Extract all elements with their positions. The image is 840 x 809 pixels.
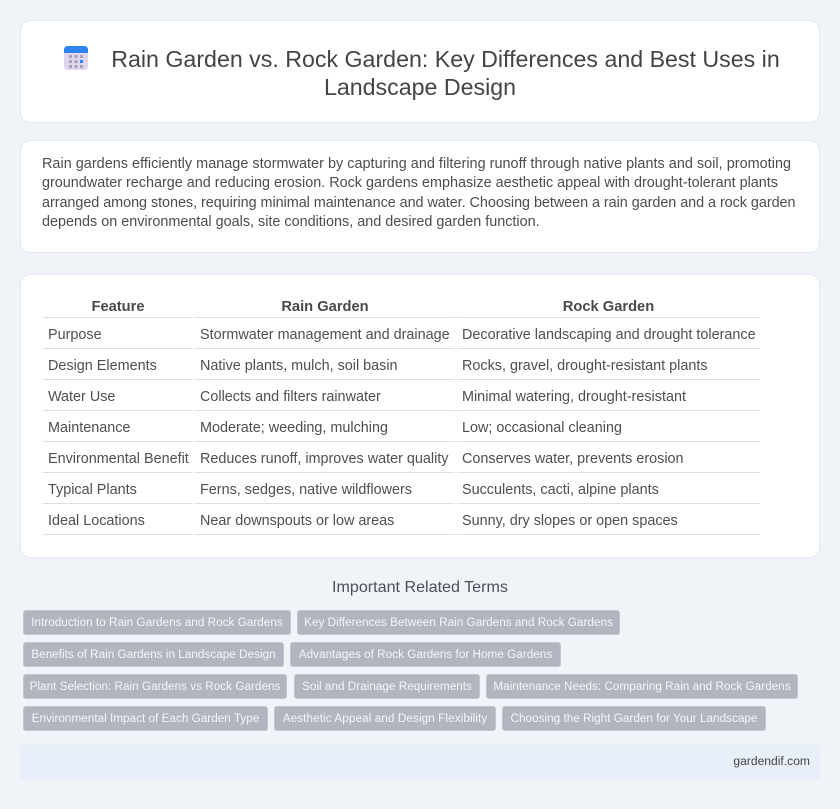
row: Water Use: Minimal watering, drought-resistant [462,389,686,405]
intro text: Rain gardens efficiently manage stormwater by capturing and filtering runoff through native plants and soil, promoting [42,156,791,172]
tag [290,642,561,667]
tag [23,674,287,699]
intro panel [20,140,820,253]
row: Ideal Locations: Near downspouts or low areas [200,513,394,529]
footer site name: gardendif.com [733,754,810,768]
title [111,46,780,100]
intro text: depends on environmental goals, site conditions, and desired garden function. [42,214,540,230]
row: Water Use: Collects and filters rainwater [200,389,381,405]
icon: calendar [64,46,88,70]
row: Environmental Benefit: Environmental Benefit [48,451,189,467]
intro text: arranged among stones, requiring minimal maintenance and water. Choosing between a rain garden and a rock garden [42,195,795,211]
row: Design Elements: Rocks, gravel, drought-resistant plants [462,358,708,374]
tag [297,610,620,635]
tag: Environmental Impact of Each Garden Type [32,712,259,725]
table headers: Rain Garden [281,299,369,315]
intro text: groundwater recharge and reducing erosion. Rock gardens emphasize aesthetic appeal with drought-tolerant plants [42,175,778,191]
tag [23,706,268,731]
tag: Introduction to Rain Gardens and Rock Gardens [31,616,283,629]
footer bar [20,745,820,779]
intro text [42,156,795,230]
row: Purpose: Stormwater management and drainage [200,327,450,343]
title: Rain Garden vs. Rock Garden: Key Differences and Best Uses in [111,46,780,72]
row: Purpose: Decorative landscaping and drought tolerance [462,327,756,343]
row: Water Use [48,389,686,405]
row: Ideal Locations: Ideal Locations [48,513,145,529]
row: Ideal Locations [48,513,678,529]
row: Design Elements: Design Elements [48,358,157,374]
tag: Benefits of Rain Gardens in Landscape Design [31,648,276,661]
row: Water Use: Water Use [48,389,115,405]
tag [274,706,496,731]
tag: Key Differences Between Rain Gardens and Rock Gardens [304,616,613,629]
row: Typical Plants [48,482,659,498]
tag: Aesthetic Appeal and Design Flexibility [283,712,487,725]
row: Maintenance [48,420,622,436]
row: Environmental Benefit: Reduces runoff, improves water quality [200,451,448,467]
row: Ideal Locations: Sunny, dry slopes or open spaces [462,513,678,529]
row: Maintenance: Moderate; weeding, mulching [200,420,388,436]
row: Typical Plants: Ferns, sedges, native wildflowers [200,482,412,498]
row: Environmental Benefit [48,451,684,467]
tag [486,674,798,699]
tag [23,642,284,667]
row: Environmental Benefit: Conserves water, prevents erosion [462,451,684,467]
related terms heading: Important Related Terms [332,578,508,596]
tag: Maintenance Needs: Comparing Rain and Rock Gardens [493,680,791,693]
tag: Choosing the Right Garden for Your Landscape [511,712,757,725]
row: Purpose [48,327,756,343]
tag: Soil and Drainage Requirements [302,680,472,693]
header card [20,20,820,123]
tag: Plant Selection: Rain Gardens vs Rock Gardens [30,680,280,693]
tag: Advantages of Rock Gardens for Home Gardens [299,648,552,661]
row: Typical Plants: Typical Plants [48,482,137,498]
tag [294,674,480,699]
title: Landscape Design [324,74,516,100]
tag list [23,610,798,731]
tag [502,706,766,731]
comparison table panel [20,274,820,558]
table headers [91,299,654,315]
row: Design Elements: Native plants, mulch, soil basin [200,358,398,374]
row: Design Elements [48,358,708,374]
row: Purpose: Purpose [48,327,102,343]
row: Maintenance: Low; occasional cleaning [462,420,622,436]
table headers: Feature [91,299,145,315]
tag [23,610,291,635]
row: Maintenance: Maintenance [48,420,130,436]
row: Typical Plants: Succulents, cacti, alpine plants [462,482,659,498]
table headers: Rock Garden [563,299,654,315]
